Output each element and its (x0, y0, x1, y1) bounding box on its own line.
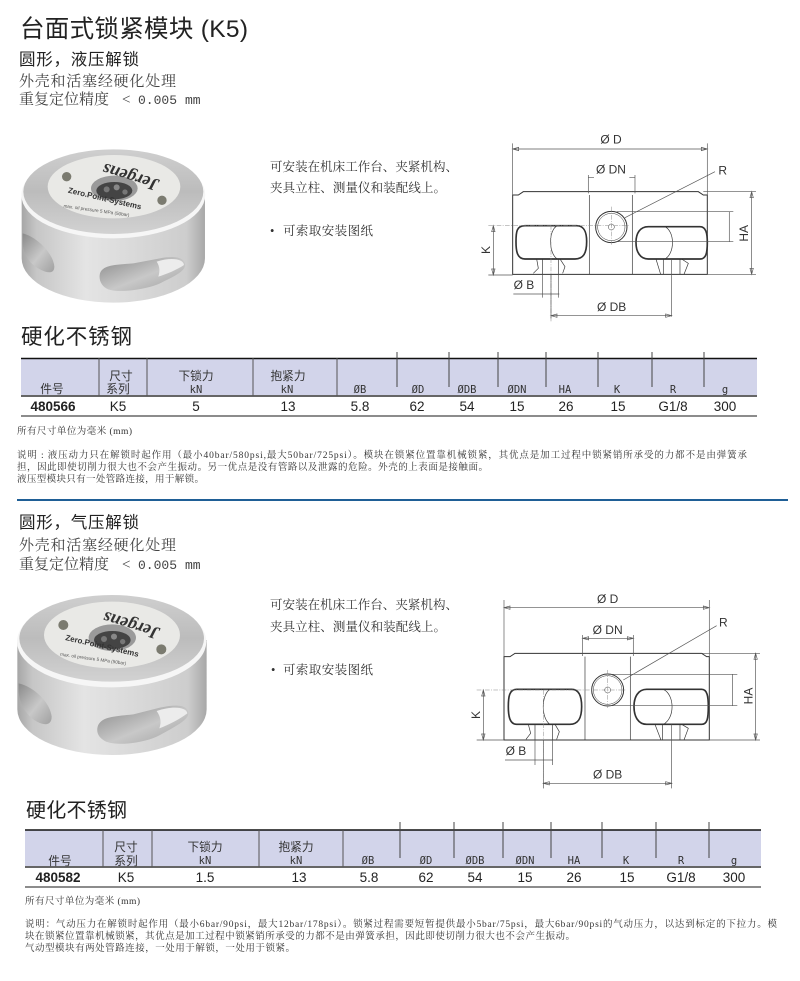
dimension drawing: pneumatic module: R (719, 615, 728, 629)
table header row: ØDB (458, 384, 476, 396)
description line 1: 说明：气动压力在解锁时起作用（最小6bar/90psi，最大12bar/178psi）。锁紧过程需要短暂提供最小5bar/75psi，最大6bar/90psi的气动压力，以达到标定的下拉力。模 (25, 918, 777, 930)
usage line 1: 可安装在机床工作台、夹紧机构、 (270, 597, 458, 612)
table header row: HA (568, 855, 581, 867)
feature: repeat accuracy: 重复定位精度 (19, 92, 109, 108)
description: hydraulic module usage (270, 159, 458, 238)
table header row (40, 369, 728, 396)
description line 2: 担，因此即使切削力很大也不会产生振动。另一优点是没有管路以及泄露的危险。外壳的上表面是接触面。 (17, 461, 488, 473)
product photo: hydraulic module: max. oil pressure 5 MPa (50bar) (63, 203, 130, 218)
table data row: 15 (509, 399, 525, 414)
feature: repeat accuracy: 重复定位精度 (19, 557, 109, 573)
table header row: R (670, 384, 677, 396)
table header row: ØDN (516, 855, 534, 867)
table data row: 13 (291, 870, 307, 885)
table data row (30, 399, 736, 414)
dimension drawing: hydraulic module: K (479, 246, 493, 254)
heading: hardened stainless steel 1: 硬化不锈钢 (21, 325, 132, 349)
table header row: ØD (412, 384, 424, 396)
feature: hardened shell: 外壳和活塞经硬化处理 (19, 72, 176, 90)
subheading: pneumatic release: 圆形，气压解锁 (19, 513, 139, 532)
product photo: pneumatic module: Jergens (101, 608, 163, 644)
feature: repeat accuracy: mm (185, 558, 201, 573)
table header row: ØDN (508, 384, 526, 396)
dimension drawing: pneumatic module: Ø D (597, 592, 619, 606)
table data row: 62 (409, 399, 425, 414)
table data row: 480582 (35, 870, 81, 885)
dimension drawing: hydraulic module (479, 132, 756, 322)
dimension drawing: pneumatic module: Ø DB (593, 767, 622, 781)
spec table: hydraulic module (21, 352, 757, 416)
product photo: hydraulic module: Zero.Point-Systems (67, 186, 143, 212)
product photo: pneumatic module (17, 595, 207, 755)
dimension drawing: pneumatic module: Ø DN (593, 623, 623, 637)
usage line 1: 可安装在机床工作台、夹紧机构、 (270, 159, 458, 174)
table header row: 尺寸 (114, 840, 138, 854)
table header row: ØB (354, 384, 366, 396)
product photo: pneumatic module: Zero.Point-Systems (65, 633, 140, 659)
table header row: 下锁力 (187, 840, 223, 854)
table header row: HA (559, 384, 572, 396)
notes: hydraulic module (17, 425, 747, 485)
dimension drawing: hydraulic module: R (718, 163, 727, 177)
table data row: 300 (723, 870, 745, 885)
product photo: hydraulic module (21, 149, 205, 303)
table data row: 15 (610, 399, 626, 414)
table data row: 5 (192, 399, 200, 414)
table header row: ØDB (466, 855, 484, 867)
table data row: 300 (714, 399, 736, 414)
table data row: 15 (517, 870, 533, 885)
table data row: 1.5 (196, 870, 214, 885)
table header row: 件号 (48, 854, 72, 868)
feature: hardened shell: 外壳和活塞经硬化处理 (19, 536, 176, 554)
feature: repeat accuracy: 0.005 (138, 558, 177, 573)
description: pneumatic module usage (270, 597, 458, 677)
spec table: pneumatic module (25, 822, 761, 887)
table header row: K (614, 384, 621, 396)
dimension drawing: hydraulic module: HA (737, 225, 751, 242)
table data row: 5.8 (360, 870, 378, 885)
bullet: drawing available: 可索取安装图纸 (283, 223, 373, 238)
table data row: 26 (566, 870, 582, 885)
table data row: 54 (467, 870, 483, 885)
table header row: 系列 (114, 854, 138, 868)
table header row (48, 840, 737, 868)
table data row (35, 870, 745, 885)
units note: 所有尺寸单位为毫米 (mm) (25, 895, 140, 907)
usage line 2: 夹具立柱、测量仪和装配线上。 (270, 619, 446, 634)
table data row: 13 (280, 399, 296, 414)
table header row: 尺寸 (109, 369, 133, 383)
bullet: drawing available: • (271, 663, 275, 677)
table header row: K (623, 855, 630, 867)
dimension drawing: hydraulic module: Ø DB (597, 300, 626, 314)
dimension drawing: pneumatic module: K (469, 711, 483, 719)
table header row: 件号 (40, 382, 64, 396)
table header row: 系列 (106, 382, 130, 396)
table header row: kN (290, 855, 302, 867)
description line 3: 液压型模块只有一处管路连接，用于解锁。 (17, 473, 204, 485)
table data row: K5 (118, 870, 134, 885)
units note: 所有尺寸单位为毫米 (mm) (17, 425, 132, 437)
table header row: 下锁力 (178, 369, 214, 383)
section 1: hydraulic heading block (19, 50, 201, 108)
description line 1: 说明 : 液压动力只在解锁时起作用（最小40bar/580psi,最大50bar/725psi）。模块在锁紧位置靠机械锁紧，其优点是加工过程中锁紧销所承受的力都不是由弹簧承 (17, 449, 747, 461)
table data row: 5.8 (351, 399, 369, 414)
dimension drawing: pneumatic module: HA (742, 688, 756, 704)
dimension drawing: pneumatic module (469, 592, 760, 788)
feature: repeat accuracy: < (122, 557, 130, 573)
dimension drawing: pneumatic module: Ø B (506, 744, 526, 758)
table data row: 26 (558, 399, 574, 414)
table header row: kN (281, 384, 293, 396)
notes: pneumatic module (25, 895, 777, 954)
table data row: 54 (459, 399, 475, 414)
table header row: g (722, 384, 728, 396)
table header row: kN (199, 855, 211, 867)
feature: repeat accuracy: 0.005 (138, 93, 177, 108)
description line 3: 气动型模块有两处管路连接，一处用于解锁，一处用于锁紧。 (25, 942, 295, 954)
table data row: G1/8 (666, 870, 696, 885)
bullet: drawing available: • (270, 224, 274, 238)
table header row: kN (190, 384, 202, 396)
table header row: 抱紧力 (278, 840, 314, 854)
table data row: 62 (418, 870, 434, 885)
table header row: R (678, 855, 685, 867)
subheading: hydraulic release: 圆形，液压解锁 (19, 50, 139, 69)
section 2: pneumatic heading block (19, 513, 201, 573)
dimension drawing: hydraulic module: Ø DN (596, 162, 626, 176)
table data row: 15 (619, 870, 635, 885)
product photo: hydraulic module: Jergens (100, 159, 162, 196)
feature: repeat accuracy: mm (185, 93, 201, 108)
description line 2: 块在锁紧位置靠机械锁紧，其优点是加工过程中锁紧销所承受的力都不是由弹簧承担，因此即使切削力很大也不会产生振动。 (25, 930, 575, 942)
table header row: ØB (362, 855, 374, 867)
table header row: ØD (420, 855, 432, 867)
bullet: drawing available: 可索取安装图纸 (283, 662, 373, 677)
page title: 台面式锁紧模块 (K5) (20, 15, 248, 43)
table data row: G1/8 (658, 399, 688, 414)
heading: hardened stainless steel 2: 硬化不锈钢 (26, 799, 127, 822)
table header row: g (731, 855, 737, 867)
dimension drawing: hydraulic module: Ø D (600, 132, 622, 146)
feature: repeat accuracy: < (122, 92, 130, 108)
table data row: K5 (110, 399, 126, 414)
usage line 2: 夹具立柱、测量仪和装配线上。 (270, 180, 446, 195)
table data row: 480566 (30, 399, 76, 414)
table header row: 抱紧力 (270, 369, 306, 383)
dimension drawing: hydraulic module: Ø B (514, 278, 534, 292)
product photo: pneumatic module: max. oil pressure 5 MPa (50bar) (60, 652, 127, 666)
